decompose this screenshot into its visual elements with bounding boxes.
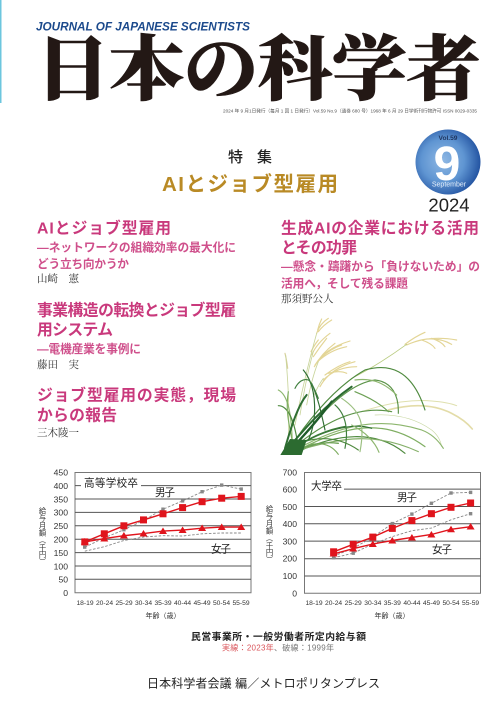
seed heads [285, 318, 457, 387]
label: female: 女子 [211, 542, 231, 556]
chart: high school wages [38, 468, 251, 620]
x axis labels: 18-19 [76, 600, 94, 607]
article 1: —ネットワークの組織効率の最大化に [37, 240, 236, 254]
y axis numbers: 300 [54, 508, 68, 518]
y axis numbers: 450 [54, 468, 68, 478]
x axis title: 年齢（歳） [146, 611, 180, 620]
y axis numbers: 700 [283, 468, 297, 478]
2023 male line [330, 500, 474, 555]
2023 female line [81, 524, 245, 544]
article 3: 三木陵一 [37, 426, 79, 439]
issue badge [416, 130, 480, 194]
y axis numbers [54, 468, 68, 598]
x axis labels: 30-34 [135, 600, 152, 607]
x axis labels: 55-59 [462, 600, 479, 607]
article 2: 事業構造の転換とジョブ型雇 [37, 300, 236, 320]
article 1: どう立ち向かうか [37, 257, 129, 271]
y axis numbers: 600 [283, 484, 297, 494]
y axis title: 給与月額（千円） [38, 506, 48, 565]
badge volume: Vol.59 [439, 135, 458, 142]
article 3: からの報告 [37, 406, 117, 424]
2023 male line [81, 493, 245, 545]
x axis labels: 18-19 [305, 600, 323, 607]
illustration: pampas grass [278, 318, 472, 455]
article 2: 用システム [37, 322, 113, 339]
y axis numbers: 200 [283, 554, 297, 564]
green blades [278, 368, 443, 454]
label: male: 男子 [155, 487, 175, 499]
2023 female line [330, 523, 475, 556]
y axis numbers: 0 [63, 588, 68, 598]
article 1: AIとジョブ型雇用 [37, 218, 171, 238]
grass base clump [280, 439, 307, 455]
x axis labels: 20-24 [325, 600, 342, 607]
x axis labels: 30-34 [364, 600, 382, 607]
label: school level: 高等学校卒 [84, 476, 138, 490]
label: male: 男子 [397, 492, 417, 504]
plot gridlines [75, 472, 251, 593]
badge month number: 9 [434, 138, 460, 191]
journal English name: JOURNAL OF JAPANESE SCIENTISTS [36, 22, 250, 34]
plot gridlines [304, 472, 480, 593]
y axis numbers: 200 [54, 534, 68, 544]
chart: university wages [265, 468, 480, 620]
article 1 [37, 218, 236, 285]
article 2: —電機産業を事例に [37, 342, 141, 356]
article 4: 那須野公人 [281, 292, 334, 305]
y axis numbers: 350 [54, 494, 68, 504]
badge month name: September [432, 182, 467, 188]
y axis numbers: 50 [58, 574, 68, 584]
x axis labels: 40-44 [174, 600, 191, 607]
y axis numbers: 0 [292, 588, 297, 598]
article 2: 藤田 実 [37, 358, 79, 371]
y axis numbers: 400 [54, 481, 68, 491]
y axis numbers: 500 [283, 502, 297, 512]
x axis labels [305, 600, 479, 607]
y axis numbers: 100 [54, 562, 68, 572]
year: 2024 [428, 194, 470, 216]
label: school level: 大学卒 [311, 480, 342, 492]
x axis labels: 20-24 [96, 600, 113, 607]
y axis numbers: 100 [283, 571, 297, 581]
x axis labels: 45-49 [423, 600, 440, 607]
y axis numbers: 400 [283, 519, 297, 529]
article 4: 活用へ，そして残る課題 [281, 276, 408, 290]
x axis labels: 50-54 [442, 600, 460, 607]
article 4 [281, 218, 480, 305]
y axis numbers: 150 [54, 548, 68, 558]
y axis numbers [283, 468, 297, 598]
label: female: 女子 [432, 543, 452, 556]
article 4: とその功罪 [281, 239, 357, 257]
x axis labels: 25-29 [345, 600, 362, 607]
publication line: 2024 年 9 月1日発行（毎月 1 回 1 日発行）Vol.59 No.9（通巻 680 号）1968 年 6 月 29 日学術刊行物許可 ISSN 0029-0335 [223, 108, 477, 114]
y axis numbers: 300 [283, 536, 297, 546]
x axis labels: 35-39 [384, 600, 401, 607]
1999 dashed lines [332, 491, 472, 559]
article 2 [37, 300, 236, 371]
y axis numbers: 250 [54, 521, 68, 531]
x axis labels: 50-54 [213, 600, 230, 607]
cyan edge strip [0, 0, 2, 103]
pale stalks [286, 333, 472, 447]
article 4: 生成AIの企業における活用 [281, 218, 479, 238]
publisher line: 日本科学者会議 編／メトロポリタンプレス [147, 676, 380, 690]
article 3: ジョブ型雇用の実態，現場 [37, 386, 236, 404]
article 3 [37, 386, 236, 439]
chart caption: 民営事業所・一般労働者所定内給与額 [191, 630, 366, 643]
feature title: AIとジョブ型雇用 [162, 172, 338, 196]
x axis title: 年齢（歳） [374, 611, 410, 620]
x axis labels: 40-44 [403, 600, 421, 607]
x axis labels: 55-59 [232, 600, 250, 607]
chart legend note: 実線：2023年、破線：1999年 [222, 642, 334, 652]
x axis labels: 45-49 [193, 600, 211, 607]
feature label: 特 集 [228, 149, 272, 166]
masthead title: 日本の科学者 [35, 31, 481, 110]
x axis labels: 25-29 [115, 600, 133, 607]
article 4: —懸念・躊躇から「負けないため」の [281, 260, 480, 274]
x axis labels [76, 600, 250, 607]
article 1: 山崎 憲 [37, 272, 79, 285]
x axis labels: 35-39 [154, 600, 172, 607]
1999 dashed lines [83, 483, 243, 551]
y axis title: 給与月額（千円） [265, 504, 274, 563]
